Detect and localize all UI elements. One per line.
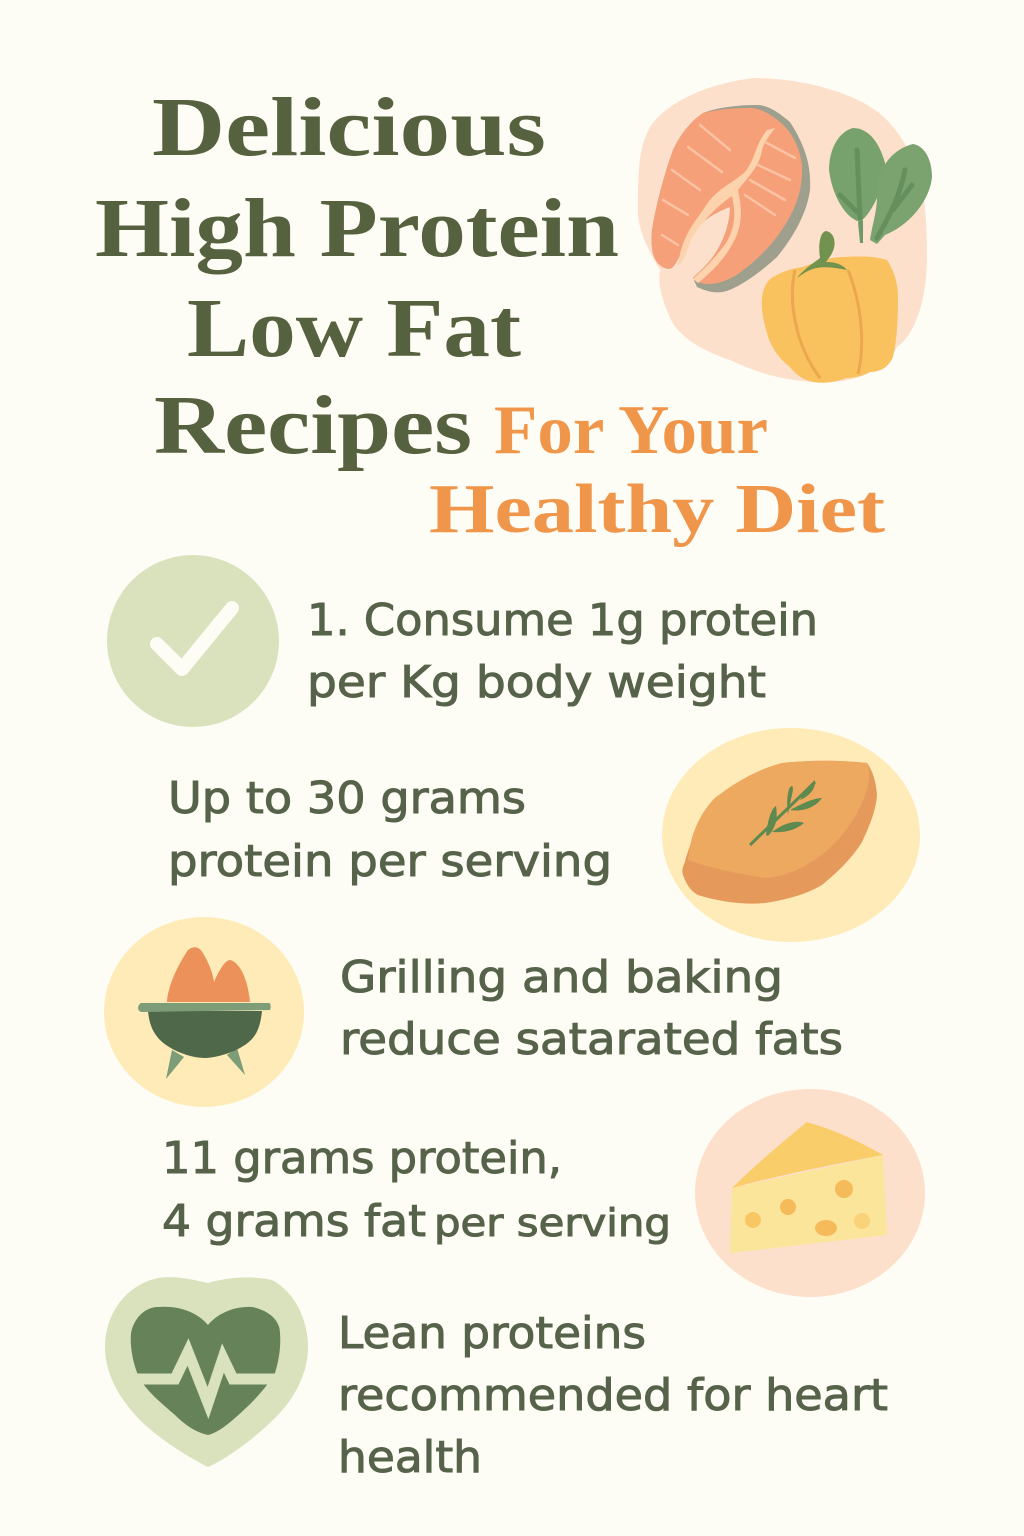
text: protein per serving xyxy=(168,773,612,887)
subtitle xyxy=(429,392,885,548)
text: protein per weight xyxy=(307,595,818,708)
text: protein per serving: Up to 30 grams xyxy=(168,773,526,824)
yellow pepper xyxy=(762,231,898,383)
icon: heart xyxy=(105,1277,308,1467)
text: lean proteins: Lean proteins xyxy=(338,1308,646,1359)
icon: salmon, spinach and pepper xyxy=(638,78,932,383)
title: Delicious xyxy=(152,81,546,174)
spinach leaves xyxy=(829,128,932,244)
text: grams per serving: 11 grams protein, xyxy=(162,1133,562,1184)
salmon steak xyxy=(652,105,810,292)
icon: grill xyxy=(104,917,304,1107)
icon: baked chicken xyxy=(662,728,920,942)
text: grilling and baking xyxy=(340,952,843,1065)
text: lean proteins: recommended for heart xyxy=(338,1370,888,1421)
title: High Protein xyxy=(95,182,619,275)
text: protein per weight: 1. Consume 1g protein xyxy=(307,595,818,646)
text: grams per serving: 4 grams fat xyxy=(162,1196,426,1247)
text: protein per serving: protein per serving xyxy=(168,836,612,887)
title: Recipes xyxy=(154,379,472,472)
text: protein per weight: per Kg body weight xyxy=(307,657,766,708)
text: grilling and baking: Grilling and baking xyxy=(340,952,783,1003)
text: lean proteins xyxy=(338,1308,888,1483)
text: lean proteins: health xyxy=(338,1432,482,1483)
icon: check badge xyxy=(107,555,279,727)
subtitle: Healthy Diet xyxy=(429,471,885,548)
text: grilling and baking: reduce satarated fats xyxy=(340,1014,843,1065)
icon: cheese xyxy=(695,1089,925,1297)
title xyxy=(95,81,619,472)
text: grams per serving: per serving xyxy=(434,1201,671,1245)
title: Low Fat xyxy=(187,282,521,375)
subtitle: For Your xyxy=(494,392,768,469)
text: grams per serving xyxy=(162,1133,671,1247)
